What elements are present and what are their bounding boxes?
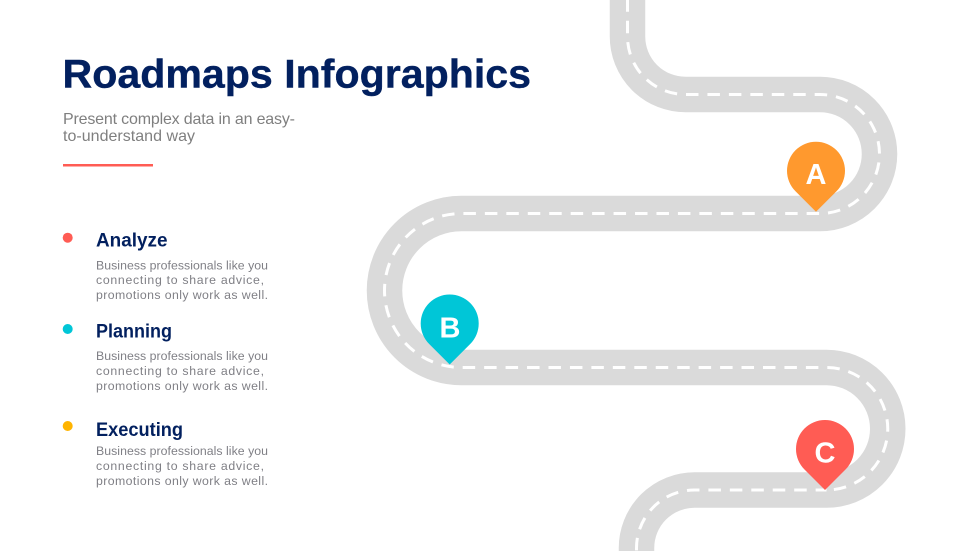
- text: Analyze description: promotions only work as well.: [96, 288, 268, 302]
- bullet: cyan: [63, 324, 73, 334]
- map pin A: [787, 142, 845, 212]
- road centre dashes: [384, 0, 888, 551]
- map pin C: [796, 420, 854, 490]
- text: Executing description: Business professionals like you: [96, 444, 268, 458]
- text: Planning description: Business professionals like you: [96, 349, 268, 363]
- bullet: red: [63, 233, 73, 243]
- list item: Analyze: [63, 231, 268, 302]
- text: Executing description: [96, 444, 268, 488]
- list item: Executing: [63, 420, 268, 488]
- map pin B: [421, 294, 479, 364]
- text: Executing description: promotions only work as well.: [96, 474, 268, 488]
- text: Executing description: connecting to share advice,: [96, 459, 264, 473]
- map pin B: B: [440, 312, 460, 344]
- road surface: [384, 0, 888, 551]
- title underline: [63, 164, 153, 166]
- map pin A: A: [806, 159, 827, 191]
- winding road: [384, 0, 888, 551]
- text: Planning description: connecting to share advice,: [96, 364, 264, 378]
- subtitle: [63, 111, 295, 145]
- text: Planning description: promotions only work as well.: [96, 379, 268, 393]
- subtitle: to-understand way: [63, 128, 195, 145]
- text: Analyze description: [96, 258, 268, 302]
- heading: Executing: Executing: [96, 420, 183, 441]
- heading: Planning: Planning: [96, 321, 172, 342]
- bullet: yellow: [63, 421, 73, 431]
- text: Analyze description: connecting to share advice,: [96, 273, 264, 287]
- heading: Analyze: Analyze: [96, 231, 168, 252]
- text: Analyze description: Business professionals like you: [96, 258, 268, 272]
- subtitle: Present complex data in an easy-: [63, 111, 295, 128]
- list item: Planning: [63, 321, 268, 393]
- title: Roadmaps Infographics: [62, 52, 531, 96]
- map pin C: C: [815, 438, 836, 470]
- text: Planning description: [96, 349, 268, 393]
